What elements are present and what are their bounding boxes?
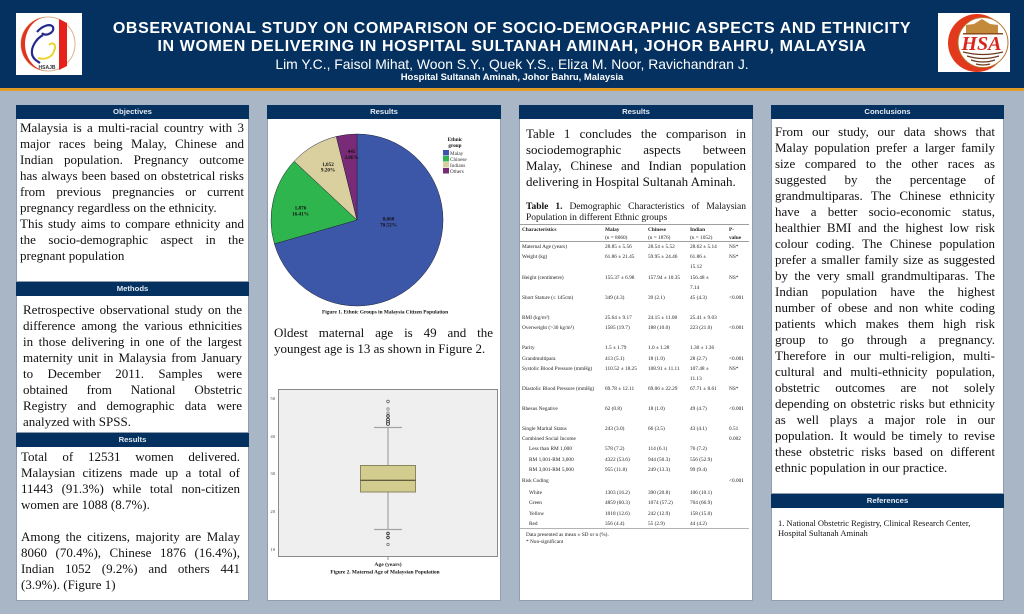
table: demographic characteristics: <0.001 xyxy=(729,478,744,484)
pie legend: Others xyxy=(450,169,464,175)
header banner xyxy=(0,0,1024,91)
table: demographic characteristics: 28 (2.7) xyxy=(690,355,707,362)
table: demographic characteristics: 249 (13.3) xyxy=(648,466,670,473)
table: demographic characteristics: 108.91 ± 11.11 xyxy=(648,366,680,372)
pie labels: 16.41% xyxy=(292,212,309,218)
pie labels: 1,876 xyxy=(295,206,307,212)
objectives text: has always been based on obstetrical risks xyxy=(20,168,244,183)
references text: 1. National Obstetric Registry, Clinical Research Center, xyxy=(778,518,970,528)
table caption: Population in different Ethnic groups xyxy=(526,212,667,222)
table: demographic characteristics: Weight (kg) xyxy=(522,253,548,260)
table: demographic characteristics: Combined Social Income xyxy=(522,436,576,442)
methods text: Registry and demographic data were xyxy=(23,398,242,413)
table: demographic characteristics: 0.51 xyxy=(729,426,739,432)
table: demographic characteristics: 0.002 xyxy=(729,436,741,442)
chart: maternal age box plot xyxy=(270,389,498,576)
table: demographic characteristics: 28.62 ± 5.14 xyxy=(690,244,717,250)
methods text: obtained from National Obstetric xyxy=(23,382,242,397)
results heading xyxy=(16,433,249,447)
conclusions text: these obstetric risks based on different xyxy=(775,444,995,459)
table: demographic characteristics: Maternal Age (years) xyxy=(522,243,567,250)
logo: left society emblem xyxy=(16,13,82,75)
table: demographic characteristics: 44 (4.2) xyxy=(690,520,707,527)
table: demographic characteristics: 349 (4.3) xyxy=(605,294,625,301)
results text: Indian 1052 (9.2%) and others 441 xyxy=(21,561,240,576)
table: demographic characteristics: 24.15 ± 11.08 xyxy=(648,315,678,321)
table: demographic characteristics: Grandmultipara xyxy=(522,356,556,362)
table: demographic characteristics: 106 (10.1) xyxy=(690,489,712,496)
table: demographic characteristics: <0.001 xyxy=(729,406,744,412)
table: demographic characteristics: 28.54 ± 5.52 xyxy=(648,244,675,250)
conclusions text: suggested by the percentage of xyxy=(775,172,995,187)
table: demographic characteristics: (n = 8060) xyxy=(605,234,628,241)
pie slice: Malay xyxy=(274,134,443,306)
table: demographic characteristics: (n = 1876) xyxy=(648,234,671,241)
table: demographic characteristics: Less than RM 1,000 xyxy=(529,446,572,452)
table: demographic characteristics: 69.06 ± 22.29 xyxy=(648,386,678,392)
conclusions text: as well plays a major role in our xyxy=(775,412,995,427)
table: demographic characteristics: Malay xyxy=(605,227,620,233)
table: demographic characteristics: Chinese xyxy=(648,227,667,233)
table: demographic characteristics: NS* xyxy=(729,366,739,372)
methods heading: Methods xyxy=(117,284,148,293)
pie legend: Malay xyxy=(450,151,464,157)
table: demographic characteristics: * Non-significant xyxy=(526,538,564,545)
outliers xyxy=(387,400,389,546)
table: demographic characteristics: P- xyxy=(729,227,734,233)
affiliation: Hospital Sultanah Aminah, Johor Bahru, Malaysia xyxy=(401,72,623,83)
table summary text xyxy=(526,126,746,189)
references heading xyxy=(771,494,1004,508)
table: demographic characteristics: 243 (3.0) xyxy=(605,425,625,432)
results text: women are 1088 (8.7%). xyxy=(21,497,150,512)
title: IN WOMEN DELIVERING IN HOSPITAL SULTANAH AMINAH, JOHOR BAHRU, MALAYSIA xyxy=(158,38,866,55)
table: demographic characteristics xyxy=(520,224,749,545)
table: demographic characteristics: Yellow xyxy=(529,511,544,517)
table: demographic characteristics: Overweight (>30 kg/m²) xyxy=(522,324,574,331)
conclusions text: Therefore in our multi-religion, multi- xyxy=(775,348,995,363)
table caption: Table 1. Demographic Characteristics of Malaysian xyxy=(526,202,746,212)
pie slice: Chinese xyxy=(271,161,357,244)
table: demographic characteristics: 39 (2.1) xyxy=(648,294,665,301)
panel: results figures xyxy=(267,105,501,601)
table: demographic characteristics: 25.64 ± 9.17 xyxy=(605,315,632,321)
conclusions text: grandmultiparas. The Chinese ethnicity xyxy=(775,188,995,203)
table: demographic characteristics: <0.001 xyxy=(729,295,744,301)
table: demographic characteristics: NS* xyxy=(729,244,739,250)
conclusions text: colour coding. The Chinese population xyxy=(775,236,995,251)
table: demographic characteristics: 390 (20.8) xyxy=(648,489,670,496)
table: demographic characteristics: 110.52 ± 18.25 xyxy=(605,366,637,372)
table: demographic characteristics: Indian xyxy=(690,227,705,233)
maternal age text: youngest age is 13 as shown in Figure 2. xyxy=(274,341,485,356)
pie labels: 1,052 xyxy=(322,162,334,168)
table: demographic characteristics: Short Stature (≤ 145cm) xyxy=(522,294,574,301)
objectives text: major races being Malay, Chinese and xyxy=(20,136,244,151)
table: demographic characteristics: 55 (2.9) xyxy=(648,520,665,527)
methods text xyxy=(23,302,242,429)
pie labels xyxy=(292,149,397,228)
pie labels: 70.52% xyxy=(380,222,397,228)
table: demographic characteristics: 49 (4.7) xyxy=(690,405,707,412)
logo: Hospital Sultanah Aminah: HSA xyxy=(960,33,1002,55)
table: demographic characteristics: Systolic Blood Pressure (mmHg) xyxy=(522,365,592,372)
conclusions text: by the very small grandmultiparas. The xyxy=(775,268,995,283)
results text: Among the citizens, majority are Malay xyxy=(21,529,240,544)
box xyxy=(360,466,416,492)
table: demographic characteristics: 157.94 ± 10.35 xyxy=(648,275,680,281)
conclusions text: obstetric outcomes are not solely xyxy=(775,380,995,395)
table: demographic characteristics: 114 (6.1) xyxy=(648,445,667,452)
table: demographic characteristics: 61.86 ± xyxy=(690,254,706,260)
conclusions text: Indian population have the highest xyxy=(775,284,995,299)
results text: Malaysian citizens made up a total of xyxy=(21,465,240,480)
pie legend: Indians xyxy=(450,163,465,169)
table: demographic characteristics: Parity xyxy=(522,345,535,351)
table: demographic characteristics: 223 (21.0) xyxy=(690,324,712,331)
table: demographic characteristics: 25.41 ± 9.03 xyxy=(690,315,717,321)
figure 2 caption: Figure 2. Maternal Age of Malaysian Population xyxy=(330,570,440,576)
objectives text xyxy=(20,120,244,263)
references heading: References xyxy=(867,496,908,505)
conclusions heading xyxy=(771,105,1004,119)
figure 1 caption: Figure 1. Ethnic Groups in Malaysia Citizen Population xyxy=(322,310,448,316)
conclusions heading: Conclusions xyxy=(864,107,911,116)
y axis ticks: 10 xyxy=(270,547,276,552)
conclusions text: prefer a smaller family size as suggested xyxy=(775,252,995,267)
results text: 8060 (70.4%), Chinese 1876 (16.4%), xyxy=(21,545,240,560)
table: demographic characteristics: 155.37 ± 6.98 xyxy=(605,275,635,281)
y axis ticks: 20 xyxy=(270,509,276,514)
methods heading xyxy=(16,282,249,296)
logo: Hospital Sultanah Aminah xyxy=(938,13,1010,72)
table: demographic characteristics: 62 (0.8) xyxy=(605,405,622,412)
pie legend: group xyxy=(448,143,462,149)
conclusions text: population. It would be timely to revise xyxy=(775,428,995,443)
table: demographic characteristics: 188 (10.0) xyxy=(648,324,670,331)
logo: left society emblem: HSAJB xyxy=(39,65,56,71)
table: demographic characteristics: 944 (50.3) xyxy=(648,456,670,463)
maternal age text xyxy=(274,325,493,356)
table: demographic characteristics: Diastolic Blood Pressure (mmHg) xyxy=(522,385,594,392)
table: demographic characteristics: Height (centimetre) xyxy=(522,274,564,281)
conclusions text: ethnic population in our practice. xyxy=(775,460,947,475)
table: demographic characteristics: 107.48 ± xyxy=(690,366,709,372)
objectives text: from previous pregnancies or current xyxy=(20,184,244,199)
table: demographic characteristics: 11.13 xyxy=(690,376,702,382)
table: demographic characteristics: 18 (1.0) xyxy=(648,355,665,362)
conclusions text: cultural and multi-ethnicity population, xyxy=(775,364,995,379)
pie legend: Chinese xyxy=(450,157,467,163)
pie slice: Others xyxy=(336,134,357,220)
panel: conclusions xyxy=(771,105,1004,494)
table summary text: delivering in Hospital Sultanah Aminah. xyxy=(526,174,736,189)
y axis ticks xyxy=(270,396,276,552)
title: OBSERVATIONAL STUDY ON COMPARISON OF SOCIO-DEMOGRAPHIC ASPECTS AND ETHNICITY xyxy=(113,20,911,37)
methods text: Retrospective observational study on the xyxy=(23,302,242,317)
table: demographic characteristics: Risk Coding xyxy=(522,478,549,484)
table: demographic characteristics: 28.85 ± 5.56 xyxy=(605,244,632,250)
table: demographic characteristics: 67.71 ± 8.61 xyxy=(690,386,717,392)
results heading: Results xyxy=(119,435,146,444)
pie labels: 8,060 xyxy=(383,216,395,222)
conclusions text: Malay population prefer a larger family xyxy=(775,140,995,155)
table: demographic characteristics: Characteristics xyxy=(522,227,556,233)
table: demographic characteristics: BMI (kg/m²) xyxy=(522,314,550,321)
table: demographic characteristics: 1303 (16.2) xyxy=(605,489,630,496)
pie legend: Ethnic xyxy=(448,137,463,143)
objectives text: This study aims to compare ethnicity and xyxy=(20,216,244,231)
table: demographic characteristics: Rhesus Negative xyxy=(522,406,558,412)
objectives text: Indian population. Pregnancy outcome xyxy=(20,152,244,167)
panel: results left xyxy=(16,433,249,601)
y axis ticks: 40 xyxy=(270,434,276,439)
table: demographic characteristics: (n = 1052) xyxy=(690,234,713,241)
table: demographic characteristics: 1.30 ± 1.36 xyxy=(690,345,714,351)
references text xyxy=(778,518,970,538)
table summary text: Table 1 concludes the comparison in xyxy=(526,126,746,141)
table: demographic characteristics: 4322 (53.6) xyxy=(605,456,630,463)
objectives heading: Objectives xyxy=(113,107,152,116)
results text: 11443 (91.3%) while total non-citizen xyxy=(21,481,240,496)
objectives text: pregnant population xyxy=(20,248,124,263)
table: demographic characteristics: <0.001 xyxy=(729,356,744,362)
methods text: in those delivering in one of the largest xyxy=(23,334,242,349)
table: demographic characteristics: 556 (52.9) xyxy=(690,456,712,463)
table: demographic characteristics: NS* xyxy=(729,386,739,392)
table: demographic characteristics: Green xyxy=(529,500,542,506)
table: demographic characteristics: RM 3,001-RM 5,000 xyxy=(529,467,574,473)
table: demographic characteristics: 61.86 ± 21.45 xyxy=(605,254,635,260)
methods text: difference among the various ethnicities xyxy=(23,318,242,333)
table: demographic characteristics: 578 (7.2) xyxy=(605,445,625,452)
conclusions text: healthier BMI and the highest low risk xyxy=(775,220,995,235)
methods text: analyzed with SPSS. xyxy=(23,414,131,429)
panel: objectives xyxy=(16,105,249,282)
table: demographic characteristics: 1585 (19.7) xyxy=(605,324,630,331)
table results heading xyxy=(519,105,753,119)
table: demographic characteristics: 43 (4.1) xyxy=(690,425,707,432)
authors: Lim Y.C., Faisol Mihat, Woon S.Y., Quek Y.S., Eliza M. Noor, Ravichandran J. xyxy=(275,56,749,72)
pie slice: Indians xyxy=(294,136,357,220)
axis label: Age (years) xyxy=(374,561,402,568)
table: demographic characteristics: 356 (4.4) xyxy=(605,520,625,527)
table: demographic characteristics: 59.95 ± 24.46 xyxy=(648,254,678,260)
whiskers xyxy=(374,427,402,560)
table: demographic characteristics: value xyxy=(729,235,742,241)
pie legend xyxy=(443,137,467,175)
table: demographic characteristics: 15.12 xyxy=(690,264,702,270)
table: demographic characteristics: 69.78 ± 12.11 xyxy=(605,386,635,392)
y axis ticks: 30 xyxy=(270,471,276,476)
conclusions text: size compared to the other races as xyxy=(775,156,995,171)
title xyxy=(113,20,911,55)
y axis ticks: 50 xyxy=(270,396,276,401)
pie labels: 9.20% xyxy=(321,168,335,174)
methods text: to December 2011. Samples were xyxy=(23,366,242,381)
table: demographic characteristics: 242 (12.9) xyxy=(648,510,670,517)
pie labels: 3.86% xyxy=(344,155,359,161)
maternal age text: Oldest maternal age is 49 and the xyxy=(274,325,493,340)
table: demographic characteristics: 99 (9.4) xyxy=(690,466,707,473)
table: demographic characteristics: Red xyxy=(529,521,538,527)
table: demographic characteristics: 76 (7.2) xyxy=(690,445,707,452)
conclusions text: patients which makes them high risk xyxy=(775,316,995,331)
table: demographic characteristics: 955 (11.8) xyxy=(605,466,627,473)
panel: references xyxy=(771,494,1004,601)
median xyxy=(360,479,416,481)
table results heading: Results xyxy=(622,107,650,116)
objectives text: Malaysia is a multi-racial country with 3 xyxy=(20,120,244,135)
chart: ethnic groups pie xyxy=(270,134,467,316)
results figures heading: Results xyxy=(370,107,398,116)
conclusions text xyxy=(775,124,995,475)
plot area xyxy=(278,390,498,556)
pie labels: 441 xyxy=(348,149,356,155)
table: demographic characteristics: White xyxy=(529,490,543,496)
references text: Hospital Sultanah Aminah xyxy=(778,528,868,538)
objectives text: the socio-demographic aspect in the xyxy=(20,232,244,247)
table: demographic characteristics: 413 (5.1) xyxy=(605,355,625,362)
table: demographic characteristics: 156.48 ± xyxy=(690,275,709,281)
results figures heading xyxy=(267,105,501,119)
objectives heading xyxy=(16,105,249,119)
table: demographic characteristics: NS* xyxy=(729,254,739,260)
table: demographic characteristics: <0.001 xyxy=(729,325,744,331)
methods text: maternity unit in Malaysia from January xyxy=(23,350,242,365)
table: demographic characteristics: 4859 (60.3) xyxy=(605,499,630,506)
table summary text: sociodemographic aspects between xyxy=(526,142,746,157)
panel: results table xyxy=(519,105,753,601)
conclusions text: From our study, our data shows that xyxy=(775,124,995,139)
table: demographic characteristics: 158 (15.0) xyxy=(690,510,712,517)
conclusions text: depending on obstetric risks but ethnicity xyxy=(775,396,995,411)
table: demographic characteristics: 7.14 xyxy=(690,285,700,291)
panel: methods xyxy=(16,282,249,433)
table: demographic characteristics: 66 (3.5) xyxy=(648,425,665,432)
table: demographic characteristics: Single Marital Status xyxy=(522,426,567,432)
results text: (3.9%). (Figure 1) xyxy=(21,577,116,592)
table: demographic characteristics: 18 (1.0) xyxy=(648,405,665,412)
results text xyxy=(21,449,240,592)
table: demographic characteristics: 1.0 ± 1.28 xyxy=(648,345,670,351)
table: demographic characteristics: 1.5 ± 1.79 xyxy=(605,345,627,351)
table: demographic characteristics: 1018 (12.6) xyxy=(605,510,630,517)
conclusions text: have a better socio-economic status, xyxy=(775,204,995,219)
objectives text: pregnancy regardless on the ethnicity. xyxy=(20,200,217,215)
conclusions text: number of obese and non white coding xyxy=(775,300,995,315)
conclusions text: group to go through a pregnancy. xyxy=(775,332,995,347)
table caption xyxy=(526,202,746,222)
table summary text: Malay, Chinese and Indian population xyxy=(526,158,746,173)
results text: Total of 12531 women delivered. xyxy=(21,449,240,464)
table: demographic characteristics: RM 1,001-RM 3,000 xyxy=(529,457,574,463)
table: demographic characteristics: 45 (4.3) xyxy=(690,294,707,301)
table: demographic characteristics: 704 (66.9) xyxy=(690,499,712,506)
table: demographic characteristics: Data presented as mean ± SD or n (%). xyxy=(526,531,609,538)
table: demographic characteristics: 1074 (57.2) xyxy=(648,499,673,506)
table: demographic characteristics: NS* xyxy=(729,275,739,281)
